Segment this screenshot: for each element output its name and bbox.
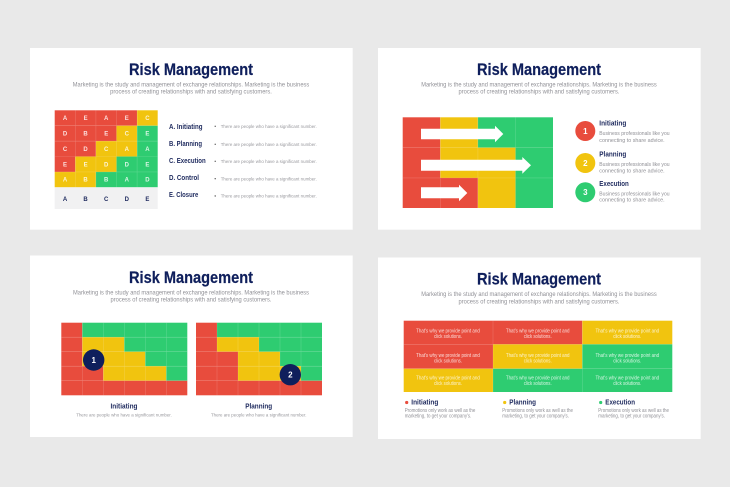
table: risk cells: click solutions.	[613, 381, 641, 387]
panel: staircase heatmaps	[30, 256, 353, 437]
chart: letter risk matrix: A	[63, 116, 68, 122]
caption: initiating: There are people who have a significant number.	[76, 412, 172, 418]
table: risk cells: click solutions.	[613, 334, 641, 340]
chart: planning heatmap	[196, 323, 322, 395]
item: execution: 3	[583, 188, 588, 197]
list: risk phases: E. Closure	[169, 190, 198, 199]
list: risk phases: B. Planning	[169, 139, 202, 148]
title: Risk Management	[477, 61, 601, 79]
item: initiating: Business professionals like you	[599, 131, 670, 137]
chart: letter risk matrix: C	[145, 116, 150, 122]
table: risk cells: That's why we provide point and	[416, 353, 480, 359]
item: planning: 2	[583, 159, 588, 168]
chart: letter risk matrix: A	[125, 147, 130, 153]
chart: letter risk matrix	[55, 110, 158, 209]
chart: letter risk matrix: B	[104, 178, 109, 184]
legend: initiating	[405, 398, 475, 420]
chart: letter risk matrix: B	[83, 132, 88, 138]
list: risk phases: C. Execution	[169, 156, 206, 165]
caption: planning: There are people who have a significant number.	[211, 412, 306, 418]
chart: letter risk matrix: A	[145, 147, 150, 153]
subtitle: process of creating relationships with and satisfying customers.	[110, 298, 272, 304]
chart: letter risk matrix: D	[145, 178, 150, 184]
chart: letter risk matrix: C	[104, 147, 109, 153]
subtitle: process of creating relationships with and satisfying customers.	[458, 90, 620, 96]
chart: letter risk matrix: E	[84, 162, 88, 168]
subtitle	[421, 292, 657, 305]
item: initiating: 1	[583, 127, 588, 136]
chart: letter risk matrix: C	[125, 132, 130, 138]
legend: planning: Planning	[509, 398, 536, 407]
panel: arrows over risk grid	[378, 48, 701, 230]
chart: letter risk matrix: E	[145, 162, 149, 168]
list: risk phases: There are people who have a significant number.	[221, 124, 317, 129]
legend: initiating: marketing, to get your company's.	[405, 414, 471, 420]
item: execution: Execution	[599, 179, 629, 188]
table: risk cells: That's why we provide point and	[506, 376, 570, 382]
list: risk phases: There are people who have a significant number.	[221, 194, 317, 199]
chart: letter risk matrix: E	[145, 132, 149, 138]
table: risk cells: That's why we provide point and	[506, 328, 570, 334]
marker: 2: 2	[288, 370, 293, 380]
table: risk cells: That's why we provide point and	[595, 376, 659, 382]
title: Risk Management	[477, 270, 601, 288]
list: risk phases	[169, 122, 317, 199]
legend: initiating: Initiating	[411, 398, 439, 407]
chart: letter risk matrix: A	[63, 178, 68, 184]
chart: letter risk matrix: E	[145, 197, 149, 203]
legend: planning: Promotions only work as well as the	[502, 408, 573, 414]
legend: execution: marketing, to get your company's.	[598, 414, 665, 420]
chart: letter risk matrix: B	[83, 197, 88, 203]
subtitle: Marketing is the study and management of exchange relationships. Marketing is the business	[421, 292, 657, 298]
item: planning	[575, 150, 670, 174]
table: risk cells: click solutions.	[434, 334, 462, 340]
subtitle: process of creating relationships with and satisfying customers.	[458, 299, 620, 305]
chart: letter risk matrix: B	[83, 178, 88, 184]
panel: 3x3 risk table	[378, 258, 701, 439]
item: planning: connecting to share advice.	[599, 168, 665, 174]
caption: initiating: Initiating	[110, 401, 138, 410]
legend: execution: Promotions only work as well as the	[598, 408, 669, 414]
title: Risk Management	[129, 61, 253, 79]
table: risk cells: click solutions.	[613, 358, 641, 364]
chart: letter risk matrix: E	[125, 116, 129, 122]
subtitle: Marketing is the study and management of exchange relationships. Marketing is the business	[421, 82, 657, 88]
table: risk cells: click solutions.	[524, 358, 552, 364]
list: risk phases: A. Initiating	[169, 122, 203, 131]
subtitle: Marketing is the study and management of exchange relationships. Marketing is the business	[73, 290, 309, 296]
caption: planning: Planning	[245, 401, 273, 410]
table: risk cells: That's why we provide point and	[416, 328, 480, 334]
arrow: execution	[421, 185, 467, 201]
chart: letter risk matrix: D	[83, 147, 88, 153]
chart: letter risk matrix: E	[104, 132, 108, 138]
panel: risk matrix with letters	[30, 48, 353, 230]
table: risk cells: That's why we provide point and	[506, 353, 570, 359]
chart: letter risk matrix: D	[104, 162, 109, 168]
chart: letter risk matrix: C	[104, 197, 109, 203]
marker: 1: 1	[91, 356, 96, 365]
list: risk phases: There are people who have a significant number.	[221, 176, 317, 181]
subtitle: process of creating relationships with and satisfying customers.	[110, 90, 272, 96]
legend: planning: marketing, to get your company's.	[502, 414, 569, 420]
list: risk phases: D. Control	[169, 173, 199, 182]
chart: letter risk matrix: E	[63, 162, 67, 168]
table: risk cells: click solutions.	[434, 358, 462, 364]
arrow: planning	[421, 157, 531, 174]
caption: planning	[211, 401, 306, 418]
item: planning: Planning	[599, 150, 627, 159]
chart: letter risk matrix: D	[63, 132, 68, 138]
chart: letter risk matrix: A	[125, 178, 130, 184]
legend: initiating: Promotions only work as well as the	[405, 408, 475, 414]
list: risk phases: There are people who have a significant number.	[221, 159, 317, 164]
chart: initiating heatmap	[61, 323, 187, 395]
chart: risk grid	[403, 117, 553, 208]
table: risk cells	[404, 321, 672, 392]
list: risk phases: There are people who have a significant number.	[221, 142, 317, 147]
table: risk cells: That's why we provide point and	[416, 376, 480, 382]
item: initiating: connecting to share advice.	[599, 138, 665, 144]
table: risk cells: click solutions.	[524, 381, 552, 387]
caption: initiating	[76, 401, 172, 418]
legend: execution	[598, 398, 669, 420]
legend: execution: Execution	[605, 398, 635, 407]
arrow: initiating	[421, 126, 503, 142]
chart: letter risk matrix: A	[104, 116, 109, 122]
item: initiating: Initiating	[599, 119, 627, 128]
item: planning: Business professionals like you	[599, 162, 670, 168]
chart: letter risk matrix: D	[125, 197, 130, 203]
item: execution: connecting to share advice.	[599, 198, 665, 204]
chart: letter risk matrix: D	[125, 162, 130, 168]
item: initiating	[575, 119, 670, 144]
subtitle	[73, 290, 309, 304]
chart: letter risk matrix: A	[63, 197, 68, 203]
subtitle	[421, 82, 657, 96]
chart: letter risk matrix: C	[63, 147, 68, 153]
item: execution: Business professionals like you	[599, 192, 670, 198]
chart: letter risk matrix: E	[84, 116, 88, 122]
subtitle: Marketing is the study and management of exchange relationships. Marketing is the business	[73, 82, 309, 88]
item: execution	[575, 179, 670, 204]
subtitle	[73, 82, 309, 96]
title: Risk Management	[129, 269, 253, 287]
table: risk cells: That's why we provide point and	[595, 353, 659, 359]
table: risk cells: click solutions.	[434, 381, 462, 387]
table: risk cells: That's why we provide point and	[595, 328, 659, 334]
legend: planning	[502, 398, 573, 420]
table: risk cells: click solutions.	[524, 334, 552, 340]
